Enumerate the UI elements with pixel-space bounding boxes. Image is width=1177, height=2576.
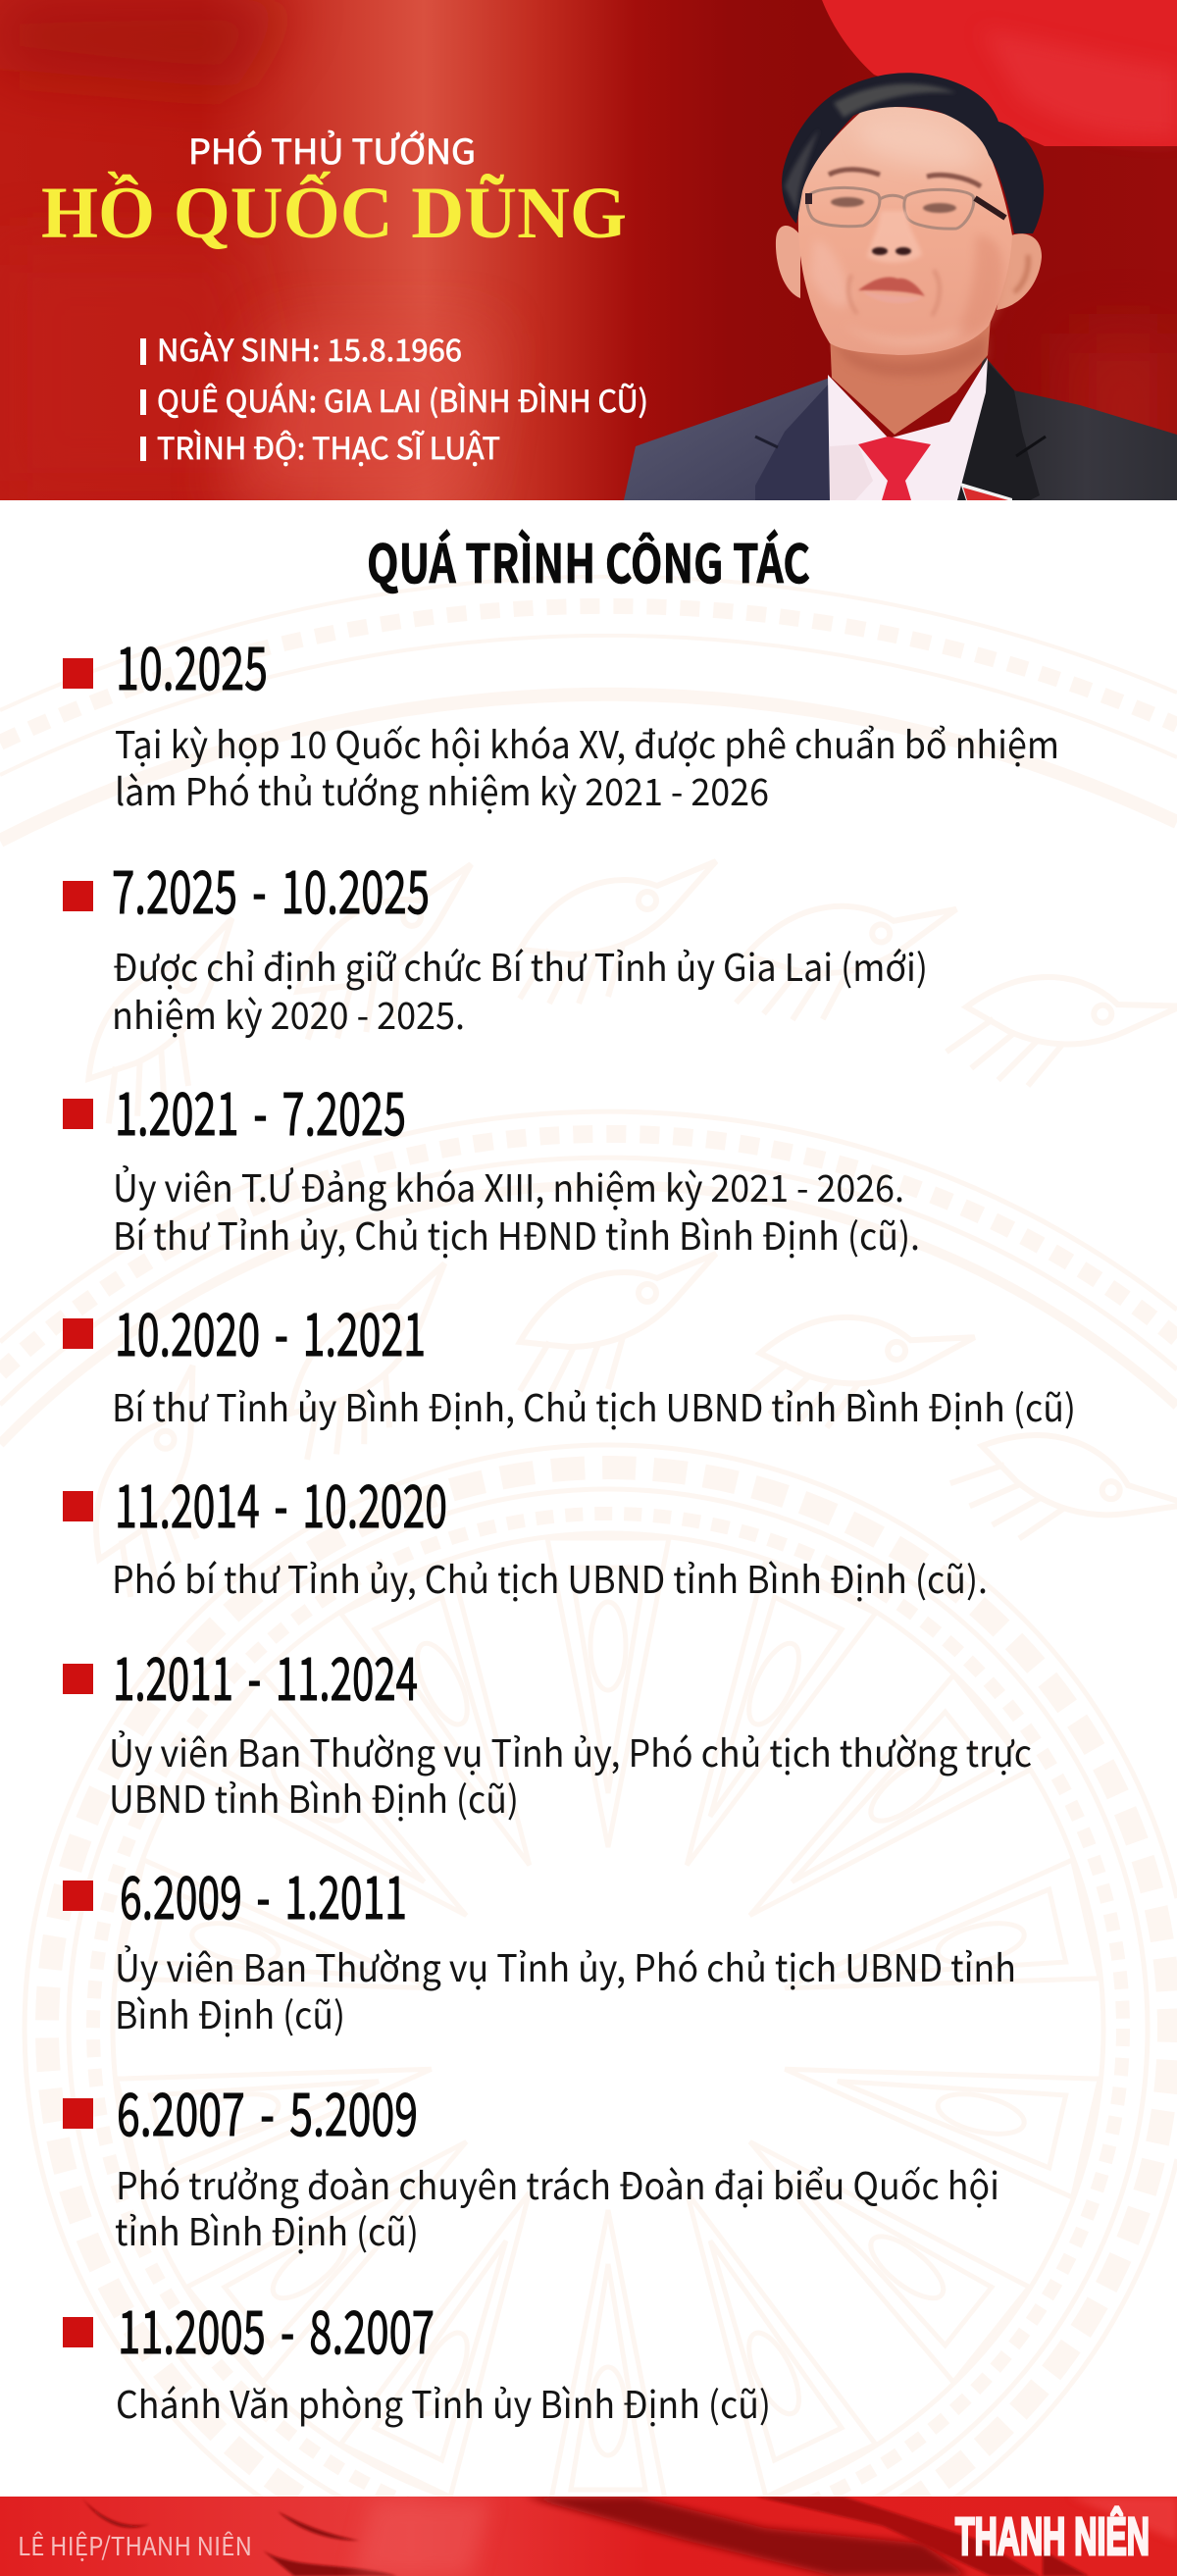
suit left: [624, 378, 830, 500]
info: date of birth: NGÀY SINH: 15.8.1966: [157, 326, 462, 370]
entry 6.2007 - 5.2009: tỉnh Bình Định (cũ): [115, 2202, 419, 2256]
portrait photo: [624, 73, 1177, 500]
neck: [830, 322, 991, 435]
entry 6.2007 - 5.2009: Phó trưởng đoàn chuyên trách Đoàn đại biểu Quốc hội: [116, 2156, 999, 2210]
entry 7.2025 - 10.2025: 7.2025 - 10.2025: [112, 846, 430, 931]
credit: LÊ HIỆP/THANH NIÊN: [18, 2527, 252, 2563]
entry 1.2021 - 7.2025: Ủy viên T.Ư Đảng khóa XIII, nhiệm kỳ 2021 - 2026.: [113, 1159, 904, 1212]
eyes: [831, 197, 864, 207]
info: education: TRÌNH ĐỘ: THẠC SĨ LUẬT: [157, 424, 500, 468]
entry 1.2011 - 11.2024: 1.2011 - 11.2024: [113, 1632, 418, 1718]
entry 11.2005 - 8.2007: [63, 2286, 771, 2429]
suit right: [980, 357, 1177, 500]
pin: [960, 483, 1012, 500]
entry 1.2011 - 11.2024: [63, 1632, 1032, 1824]
footer band: [0, 2497, 1177, 2576]
entry 7.2025 - 10.2025: nhiệm kỳ 2020 - 2025.: [112, 986, 465, 1040]
entry 11.2005 - 8.2007: 11.2005 - 8.2007: [118, 2286, 435, 2371]
glasses: [807, 187, 974, 229]
entry 10.2020 - 1.2021: Bí thư Tỉnh ủy Bình Định, Chủ tịch UBND tỉnh Bình Định (cũ): [112, 1378, 1076, 1432]
entry 10.2025: Tại kỳ họp 10 Quốc hội khóa XV, được phê chuẩn bổ nhiệm: [115, 715, 1059, 769]
entry 1.2011 - 11.2024: Ủy viên Ban Thường vụ Tỉnh ủy, Phó chủ tịch thường trực: [109, 1724, 1032, 1777]
entry 10.2020 - 1.2021: 10.2020 - 1.2021: [115, 1288, 426, 1373]
name heading: HỒ QUỐC DŨNG: [41, 172, 627, 254]
entry 6.2009 - 1.2011: Bình Định (cũ): [115, 1985, 345, 2039]
ears: [776, 226, 800, 298]
entry 11.2014 - 10.2020: Phó bí thư Tỉnh ủy, Chủ tịch UBND tỉnh Bình Định (cũ).: [112, 1550, 988, 1604]
entry 10.2020 - 1.2021: [63, 1288, 1076, 1432]
header banner: [0, 0, 1177, 500]
entry 1.2021 - 7.2025: Bí thư Tỉnh ủy, Chủ tịch HĐND tỉnh Bình Định (cũ).: [113, 1207, 920, 1261]
entry 1.2021 - 7.2025: [63, 1067, 920, 1261]
subtitle: PHÓ THỦ TƯỚNG: [188, 125, 476, 175]
background drum pattern: [0, 577, 1177, 2576]
top right flag fold: [822, 0, 1177, 146]
mouth: [858, 277, 925, 296]
entry 6.2009 - 1.2011: Ủy viên Ban Thường vụ Tỉnh ủy, Phó chủ tịch UBND tỉnh: [115, 1938, 1016, 1992]
entry 1.2021 - 7.2025: 1.2021 - 7.2025: [115, 1067, 406, 1153]
entry 1.2011 - 11.2024: UBND tỉnh Bình Định (cũ): [109, 1770, 519, 1824]
info: hometown: QUÊ QUÁN: GIA LAI (BÌNH ĐÌNH CŨ): [157, 377, 648, 421]
entry 6.2007 - 5.2009: 6.2007 - 5.2009: [117, 2068, 418, 2153]
entry 10.2025: làm Phó thủ tướng nhiệm kỳ 2021 - 2026: [115, 762, 769, 816]
entry 11.2014 - 10.2020: [63, 1460, 988, 1604]
entry 7.2025 - 10.2025: [63, 846, 928, 1040]
nose: [867, 211, 922, 263]
hair: [782, 73, 1044, 233]
entry 11.2005 - 8.2007: Chánh Văn phòng Tỉnh ủy Bình Định (cũ): [116, 2375, 771, 2429]
entry 6.2009 - 1.2011: 6.2009 - 1.2011: [120, 1851, 407, 1936]
section title: QUÁ TRÌNH CÔNG TÁC: [367, 521, 810, 598]
entry 10.2025: [63, 622, 1059, 816]
face: [798, 107, 1012, 355]
entry 10.2025: 10.2025: [116, 622, 268, 707]
entry 6.2007 - 5.2009: [63, 2068, 999, 2256]
shirt: [828, 358, 988, 500]
entry 11.2014 - 10.2020: 11.2014 - 10.2020: [115, 1460, 447, 1545]
tie: [858, 437, 931, 500]
entry 7.2025 - 10.2025: Được chỉ định giữ chức Bí thư Tỉnh ủy Gia Lai (mới): [113, 938, 928, 992]
entry 6.2009 - 1.2011: [63, 1851, 1016, 2039]
eyebrows: [829, 170, 880, 175]
